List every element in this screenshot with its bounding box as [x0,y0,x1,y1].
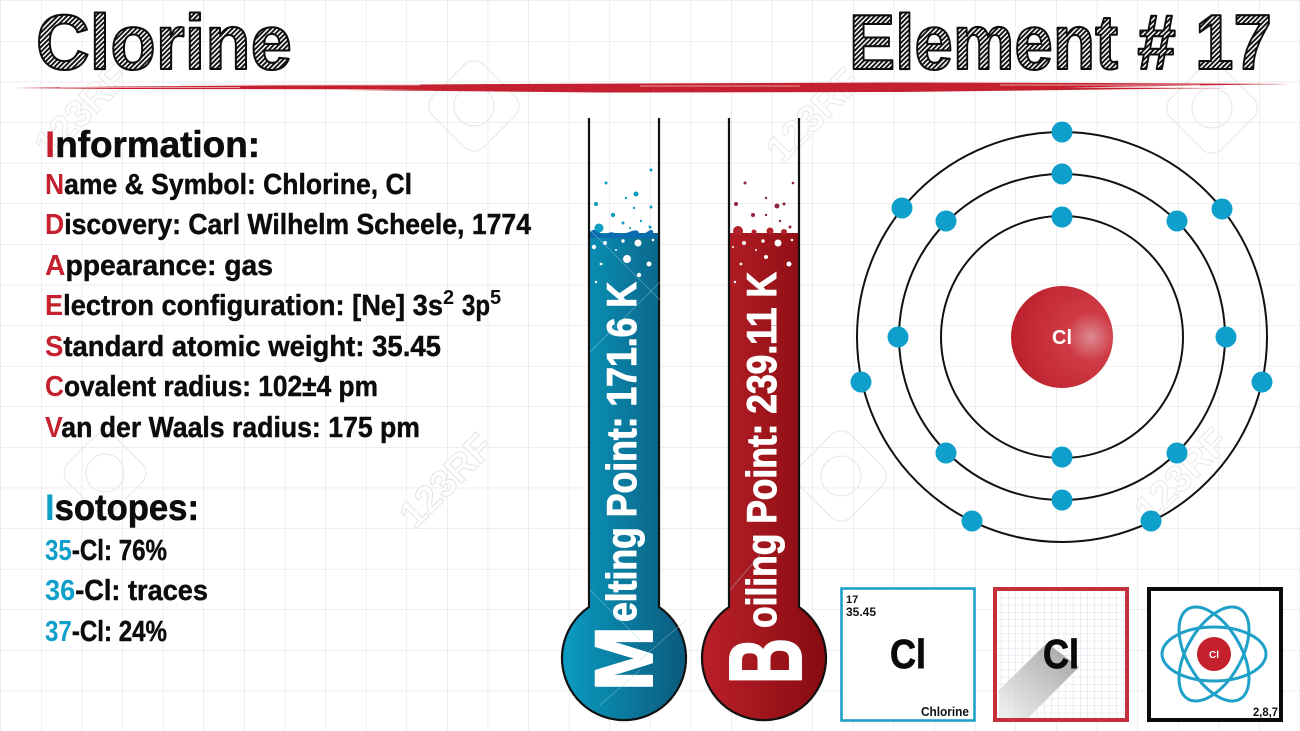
isotope 37: 37-Cl: 24% [45,616,167,648]
watermarks: 123RF [1127,421,1237,531]
watermarks: 123RF [392,426,502,536]
watermarks [27,55,1263,536]
standard atomic weight: Standard atomic weight: 35.45 [45,331,441,363]
discovery: Discovery: Carl Wilhelm Scheele, 1774 [45,209,531,241]
card: atom icon [1149,589,1281,720]
label: B initial: B [708,638,823,684]
electron configuration: Electron configuration: [Ne] 3s [45,290,443,322]
panel: information [45,124,531,444]
label: melting point value: elting Point: 171.6 K [598,282,645,622]
watermark scratches over thermometers [590,230,760,705]
watermarks: 123RF [759,61,869,171]
electron configuration: 3p [462,290,490,322]
covalent radius: Covalent radius: 102±4 pm [45,371,378,403]
heading: Information: Information: [45,124,260,165]
panel: isotopes [45,487,208,648]
isotope 35: 35-Cl: 76% [45,535,167,567]
atomic weight: 35.45 [846,607,877,619]
heading: Isotopes: Isotopes: [45,487,199,528]
isotope 36: 36-Cl: traces [45,575,208,607]
title: Clorine: Clorine [36,0,292,86]
card: long shadow symbol [995,589,1127,720]
electron configuration: 2 [443,287,454,309]
nucleus symbol: Cl [1209,650,1219,661]
thermometer: boiling point [702,118,826,720]
electrons [850,122,1272,532]
appearance: Appearance: gas [45,250,273,282]
label: boiling point value: oiling Point: 239.11 K [738,272,785,628]
electron configuration: 5 [490,287,501,309]
label: M initial: M [579,626,670,691]
van der waals radius: Van der Waals radius: 175 pm [45,412,420,444]
symbol: Cl [890,631,926,677]
name and symbol: Name & Symbol: Chlorine, Cl [45,169,412,201]
nucleus [1011,286,1113,388]
orbits [857,132,1267,542]
electron shells: 2,8,7 [1253,707,1278,719]
thermometer: melting point [562,118,686,720]
icon: nucleus [1197,637,1231,671]
watermarks: 123RF [27,56,137,166]
red brush divider [14,82,1290,92]
icon: orbit ellipses [1162,595,1266,713]
element name: Chlorine [921,705,969,719]
atomic number: 17 [846,594,858,606]
nucleus: Cl [1052,327,1072,349]
atom diagram [850,122,1272,542]
symbol: Cl [1043,631,1079,677]
card: periodic table entry [842,588,974,720]
